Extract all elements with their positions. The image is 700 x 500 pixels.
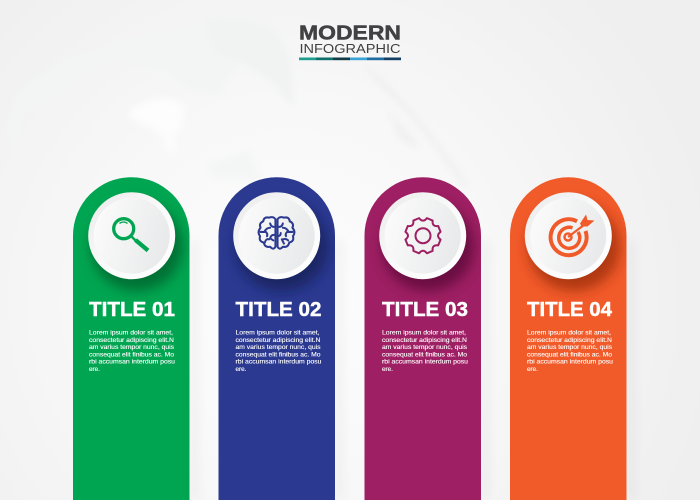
panel: title 02	[218, 177, 335, 500]
text block: am varius tempor nunc, quis	[527, 345, 612, 351]
text block: ere.	[236, 367, 247, 373]
icon: brain	[259, 217, 294, 249]
heading: TITLE 01	[89, 298, 175, 321]
heading: TITLE 02	[236, 298, 322, 321]
icon disc	[379, 192, 466, 279]
text block: rbi accumsan interdum posu	[527, 360, 613, 366]
text block: am varius tempor nunc, quis	[89, 345, 174, 351]
text block: Lorem ipsum dolor sit amet,	[236, 330, 320, 336]
text block: ere.	[382, 367, 393, 373]
text block: am varius tempor nunc, quis	[382, 345, 467, 351]
panel: title 03	[364, 177, 481, 500]
infographic canvas	[73, 25, 636, 500]
text block: consectetur adipiscing elit.N	[89, 338, 174, 344]
icon: magnifier	[114, 219, 148, 250]
title: INFOGRAPHIC	[300, 41, 400, 56]
panel: title 01	[73, 177, 190, 500]
text block: ere.	[89, 367, 100, 373]
title	[299, 22, 401, 60]
icon disc	[233, 192, 320, 279]
text block: Lorem ipsum dolor sit amet,	[527, 330, 611, 336]
text block: Lorem ipsum dolor sit amet,	[89, 330, 173, 336]
text block: consectetur adipiscing elit.N	[236, 338, 320, 344]
text block: consequat elit finibus ac. Mo	[527, 352, 613, 358]
icon disc	[88, 192, 175, 279]
text block: Lorem ipsum dolor sit amet,	[382, 330, 466, 336]
text block: rbi accumsan interdum posu	[236, 360, 322, 366]
text block: rbi accumsan interdum posu	[382, 360, 468, 366]
text block: consequat elit finibus ac. Mo	[382, 352, 468, 358]
text block: consectetur adipiscing elit.N	[382, 338, 467, 344]
text block: consequat elit finibus ac. Mo	[89, 352, 175, 358]
text block: ere.	[527, 367, 538, 373]
panel: title 04	[510, 177, 626, 500]
text block: consectetur adipiscing elit.N	[527, 338, 612, 344]
icon: gear	[405, 218, 441, 253]
icon: target	[551, 214, 594, 255]
title: MODERN	[299, 22, 401, 44]
panel shadows	[190, 240, 636, 500]
icon disc	[525, 192, 612, 279]
text block: consequat elit finibus ac. Mo	[236, 352, 321, 358]
heading: TITLE 03	[382, 298, 468, 321]
heading: TITLE 04	[527, 298, 613, 321]
text block: am varius tempor nunc, quis	[236, 345, 320, 351]
text block: rbi accumsan interdum posu	[89, 360, 175, 366]
